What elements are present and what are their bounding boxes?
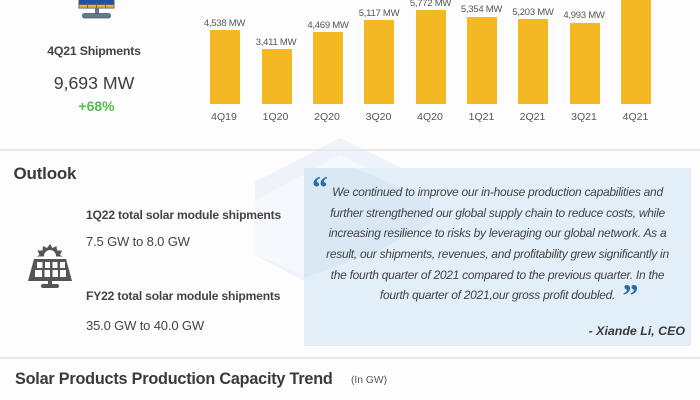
quote line 3: increasing resilience to risks by leveraging our global network. As a: [329, 226, 666, 240]
bar chart: quarterly shipments: [204, 0, 651, 122]
quote line 4: result, our shipments, revenues, and profitability grew significantly in: [326, 247, 669, 261]
icon: solar panel with sun: [28, 244, 72, 288]
icon: closing quote mark: ”: [622, 277, 638, 313]
quote line 2: further strengthened our global supply chain to reduce costs, while: [330, 206, 665, 220]
bar 2Q20: [313, 32, 342, 104]
quote line 6: fourth quarter of 2021,our gross profit doubled.: [380, 288, 615, 302]
axis label 1Q21: 1Q21: [469, 110, 494, 122]
value label 4Q19: 4,538 MW: [204, 18, 245, 29]
bar 4Q19: [210, 30, 240, 104]
axis label 1Q20: 1Q20: [263, 110, 288, 122]
bar 1Q20: [262, 49, 292, 104]
bar 4Q20: [416, 10, 446, 104]
value label 1Q21: 5,354 MW: [461, 4, 502, 15]
icon: opening quote mark: “: [312, 169, 328, 205]
watermark tint inside panel: [304, 168, 430, 278]
bar 3Q20: [364, 20, 394, 104]
axis label 3Q20: 3Q20: [366, 110, 391, 122]
axis label 4Q21: 4Q21: [623, 110, 648, 122]
axis label 3Q21: 3Q21: [571, 110, 597, 122]
axis label 2Q21: 2Q21: [520, 110, 545, 122]
section title: production capacity trend: [15, 370, 387, 388]
unit note: (In GW): [351, 375, 387, 386]
axis label 4Q20: 4Q20: [417, 110, 443, 122]
heading: Outlook: Outlook: [14, 164, 76, 183]
quote line 1: We continued to improve our in-house production capabilities and: [332, 185, 663, 199]
value label 3Q20: 5,117 MW: [359, 8, 399, 19]
bar 1Q21: [467, 16, 496, 104]
axis label 4Q19: 4Q19: [211, 110, 237, 122]
value: FY22 range: 35.0 GW to 40.0 GW: [86, 318, 204, 333]
quote line 5: the fourth quarter of 2021 compared to the previous quarter. In the: [331, 268, 664, 282]
stat: 9,693 MW: 9,693 MW: [54, 73, 134, 93]
background watermark: hexagon: [255, 138, 401, 281]
value label 3Q21: 4,993 MW: [563, 10, 605, 21]
icon: solar panel on stand: [78, 0, 114, 18]
text block: 1Q22 guidance: [86, 208, 281, 249]
heading: 4Q21 Shipments: 4Q21 Shipments: [47, 44, 141, 58]
axis label 2Q20: 2Q20: [314, 110, 340, 122]
heading: Solar Products Production Capacity Trend: [15, 370, 333, 388]
bar 3Q21: [570, 22, 600, 104]
value label 1Q20: 3,411 MW: [256, 37, 296, 48]
panel: CEO quote: [304, 168, 691, 346]
label: FY22 shipments: FY22 total solar module shipments: [86, 289, 280, 303]
value: 1Q22 range: 7.5 GW to 8.0 GW: [86, 234, 190, 249]
bar 4Q21: [621, 0, 650, 104]
stat: +68% growth: +68%: [78, 98, 115, 114]
value label 2Q20: 4,469 MW: [307, 20, 349, 31]
bar 2Q21: [518, 19, 548, 104]
value label 2Q21: 5,203 MW: [512, 7, 554, 18]
text block: FY22 guidance: [86, 289, 280, 333]
label: 1Q22 shipments: 1Q22 total solar module shipments: [86, 208, 281, 222]
attribution: - Xiande Li, CEO: [589, 324, 685, 338]
